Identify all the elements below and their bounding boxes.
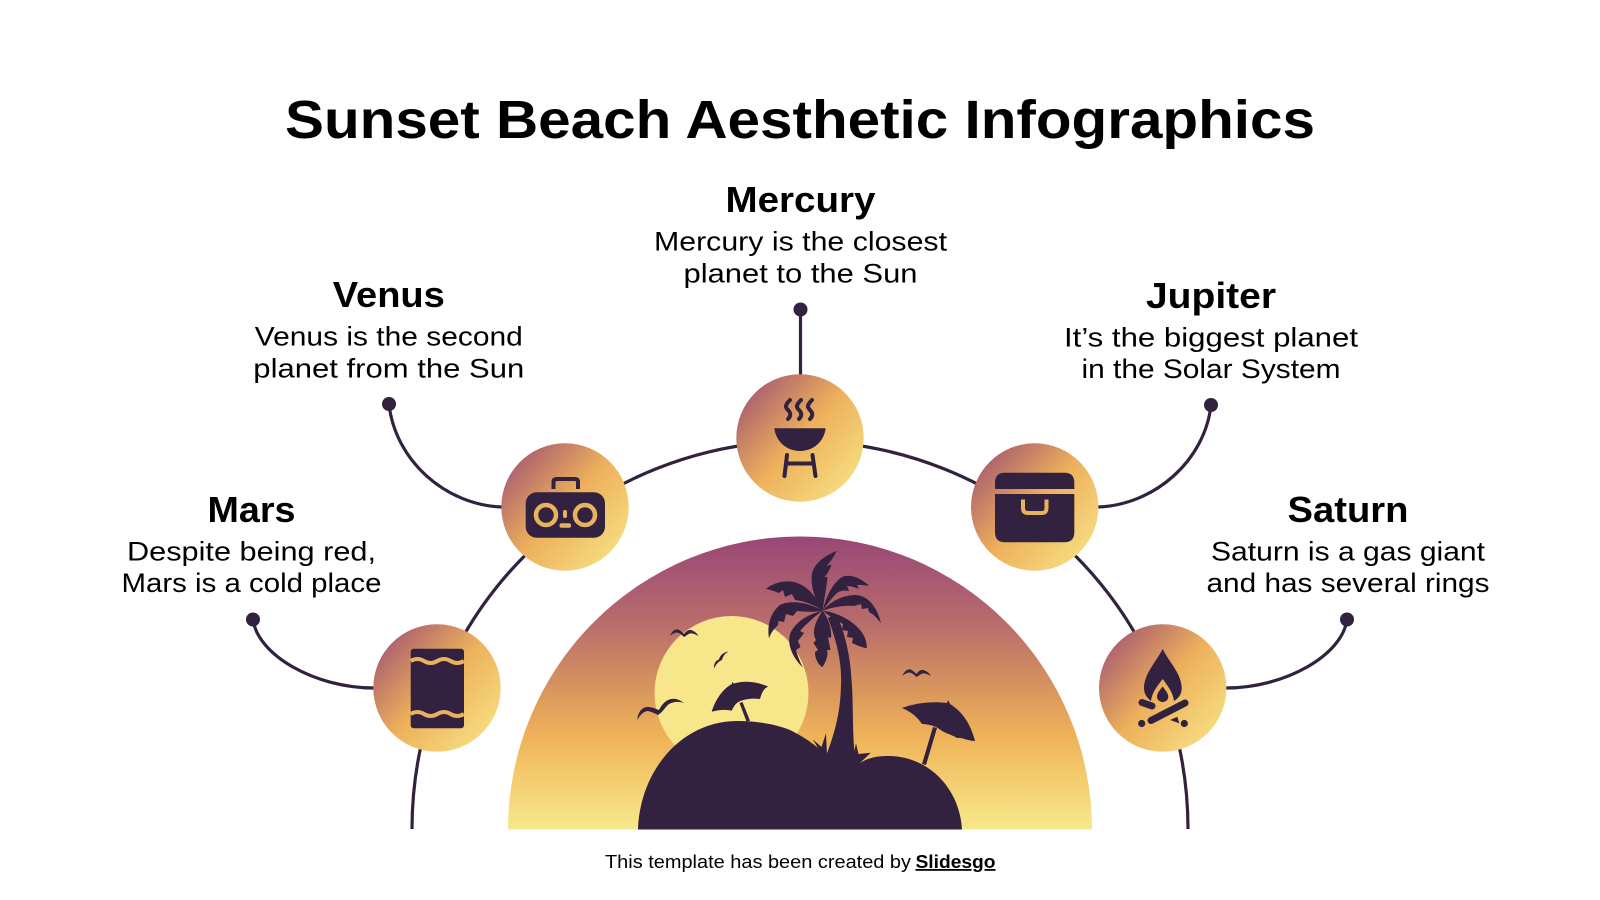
Mars connector <box>246 612 374 688</box>
Jupiter connector <box>1098 398 1218 507</box>
Mars description <box>122 536 382 598</box>
Venus description: planet from the Sun <box>253 354 524 384</box>
panel: Venus <box>253 274 629 571</box>
icon: barbecue grill <box>774 400 826 476</box>
Saturn description: Saturn is a gas giant <box>1211 536 1486 566</box>
Jupiter description <box>1064 322 1359 384</box>
Saturn connector <box>1226 612 1354 688</box>
Venus description: Venus is the second <box>255 322 523 352</box>
Mercury description: Mercury is the closest <box>654 226 948 256</box>
birds <box>637 629 931 720</box>
Mercury icon disc <box>736 374 864 502</box>
footer credit: Slidesgo <box>916 852 996 872</box>
Venus heading: Venus <box>333 274 445 315</box>
Mercury connector <box>794 302 808 376</box>
icon: cooler box <box>995 473 1074 542</box>
Mars heading: Mars <box>208 489 296 530</box>
palm tree <box>766 551 881 758</box>
sun <box>654 616 808 770</box>
title: Sunset Beach Aesthetic Infographics <box>285 90 1315 150</box>
panel: Mercury <box>654 179 948 502</box>
Saturn icon disc <box>1099 624 1226 752</box>
Saturn heading: Saturn <box>1288 489 1408 530</box>
island with grass <box>638 721 962 830</box>
Mercury description: planet to the Sun <box>684 258 918 288</box>
footer credit: This template has been created by <box>605 852 911 872</box>
Venus description <box>253 322 524 384</box>
left umbrella <box>712 682 768 722</box>
panel: Saturn <box>1099 489 1490 752</box>
Mercury heading: Mercury <box>726 179 876 220</box>
panel: Jupiter <box>971 275 1359 571</box>
Jupiter description: in the Solar System <box>1082 354 1340 384</box>
Mars description: Mars is a cold place <box>122 568 382 598</box>
Jupiter icon disc <box>971 443 1098 571</box>
icon: boombox <box>526 479 605 538</box>
panel: sunset beach illustration <box>508 536 1092 830</box>
panel: Mars <box>122 489 501 752</box>
Jupiter description: It’s the biggest planet <box>1064 322 1359 352</box>
Mercury description <box>654 226 948 288</box>
sunset dome <box>508 536 1092 830</box>
Jupiter heading: Jupiter <box>1146 275 1276 316</box>
Venus connector <box>382 397 502 507</box>
main arc connecting the icons <box>412 441 1188 829</box>
Mars icon disc <box>373 624 501 752</box>
right umbrella <box>902 700 975 765</box>
Saturn description: and has several rings <box>1206 568 1490 598</box>
icon: towel <box>411 649 464 728</box>
Venus icon disc <box>501 443 629 571</box>
Saturn description <box>1206 536 1490 598</box>
Mars description: Despite being red, <box>127 536 376 566</box>
icon: campfire <box>1138 649 1188 727</box>
